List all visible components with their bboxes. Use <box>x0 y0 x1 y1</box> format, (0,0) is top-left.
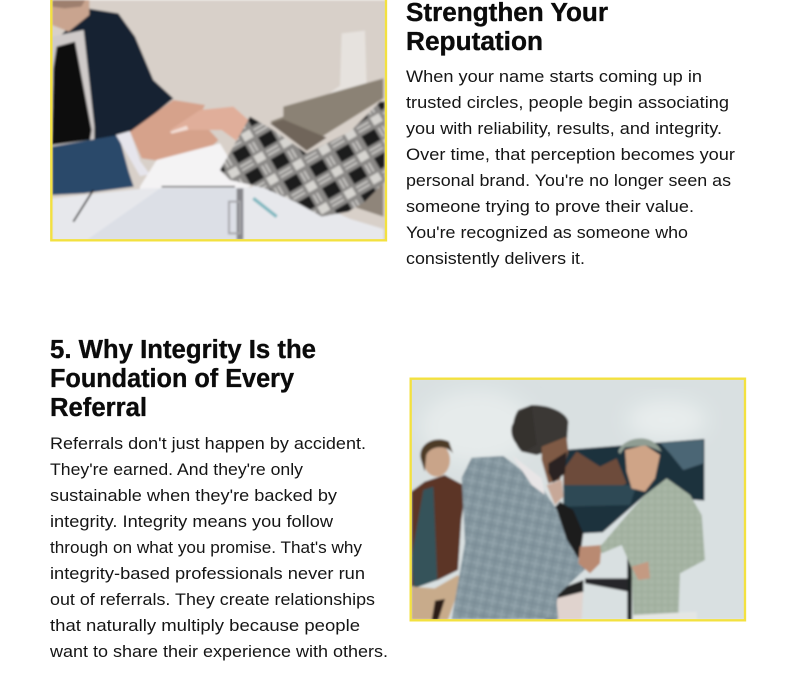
text block: integrity paragraph: Referrals don't just happen by accident. <box>50 434 366 453</box>
text block: reputation paragraph: consistently delivers it. <box>406 249 585 268</box>
text block: reputation paragraph: You're recognized as someone who <box>406 223 688 242</box>
heading: 5. Why Integrity Is the Foundation of Every Referral: Referral <box>50 394 147 422</box>
text block: integrity paragraph: want to share their experience with others. <box>49 642 388 661</box>
text block: integrity paragraph: that naturally multiply because people <box>50 616 360 635</box>
text block: reputation paragraph: When your name starts coming up in <box>406 67 702 86</box>
photo: handshake across a desk <box>50 0 387 241</box>
heading: 5. Why Integrity Is the Foundation of Every Referral: Foundation of Every <box>50 365 295 393</box>
text block: integrity paragraph: integrity. Integrity means you follow <box>50 512 334 531</box>
text block: reputation paragraph <box>406 67 735 268</box>
heading: 5. Why Integrity Is the Foundation of Every Referral <box>50 336 316 422</box>
text block: integrity paragraph: integrity-based professionals never run <box>50 564 365 583</box>
heading: Strengthen Your Reputation: Reputation <box>406 28 543 56</box>
text block: integrity paragraph <box>49 434 388 661</box>
text block: reputation paragraph: you with reliability, results, and integrity. <box>406 119 722 138</box>
text block: integrity paragraph: through on what you promise. That's why <box>50 538 362 557</box>
text block: integrity paragraph: out of referrals. They create relationships <box>50 590 375 609</box>
text block: integrity paragraph: They're earned. And they're only <box>50 460 304 479</box>
heading: Strengthen Your Reputation <box>406 0 608 56</box>
text block: reputation paragraph: Over time, that perception becomes your <box>406 145 735 164</box>
photo: two men shaking hands in a gallery <box>410 378 746 620</box>
heading: 5. Why Integrity Is the Foundation of Every Referral: 5. Why Integrity Is the <box>50 336 316 364</box>
text block: integrity paragraph: sustainable when they're backed by <box>50 486 338 505</box>
text block: reputation paragraph: someone trying to prove their value. <box>406 197 694 216</box>
text block: reputation paragraph: personal brand. You're no longer seen as <box>406 171 731 190</box>
text block: reputation paragraph: trusted circles, people begin associating <box>406 93 729 112</box>
